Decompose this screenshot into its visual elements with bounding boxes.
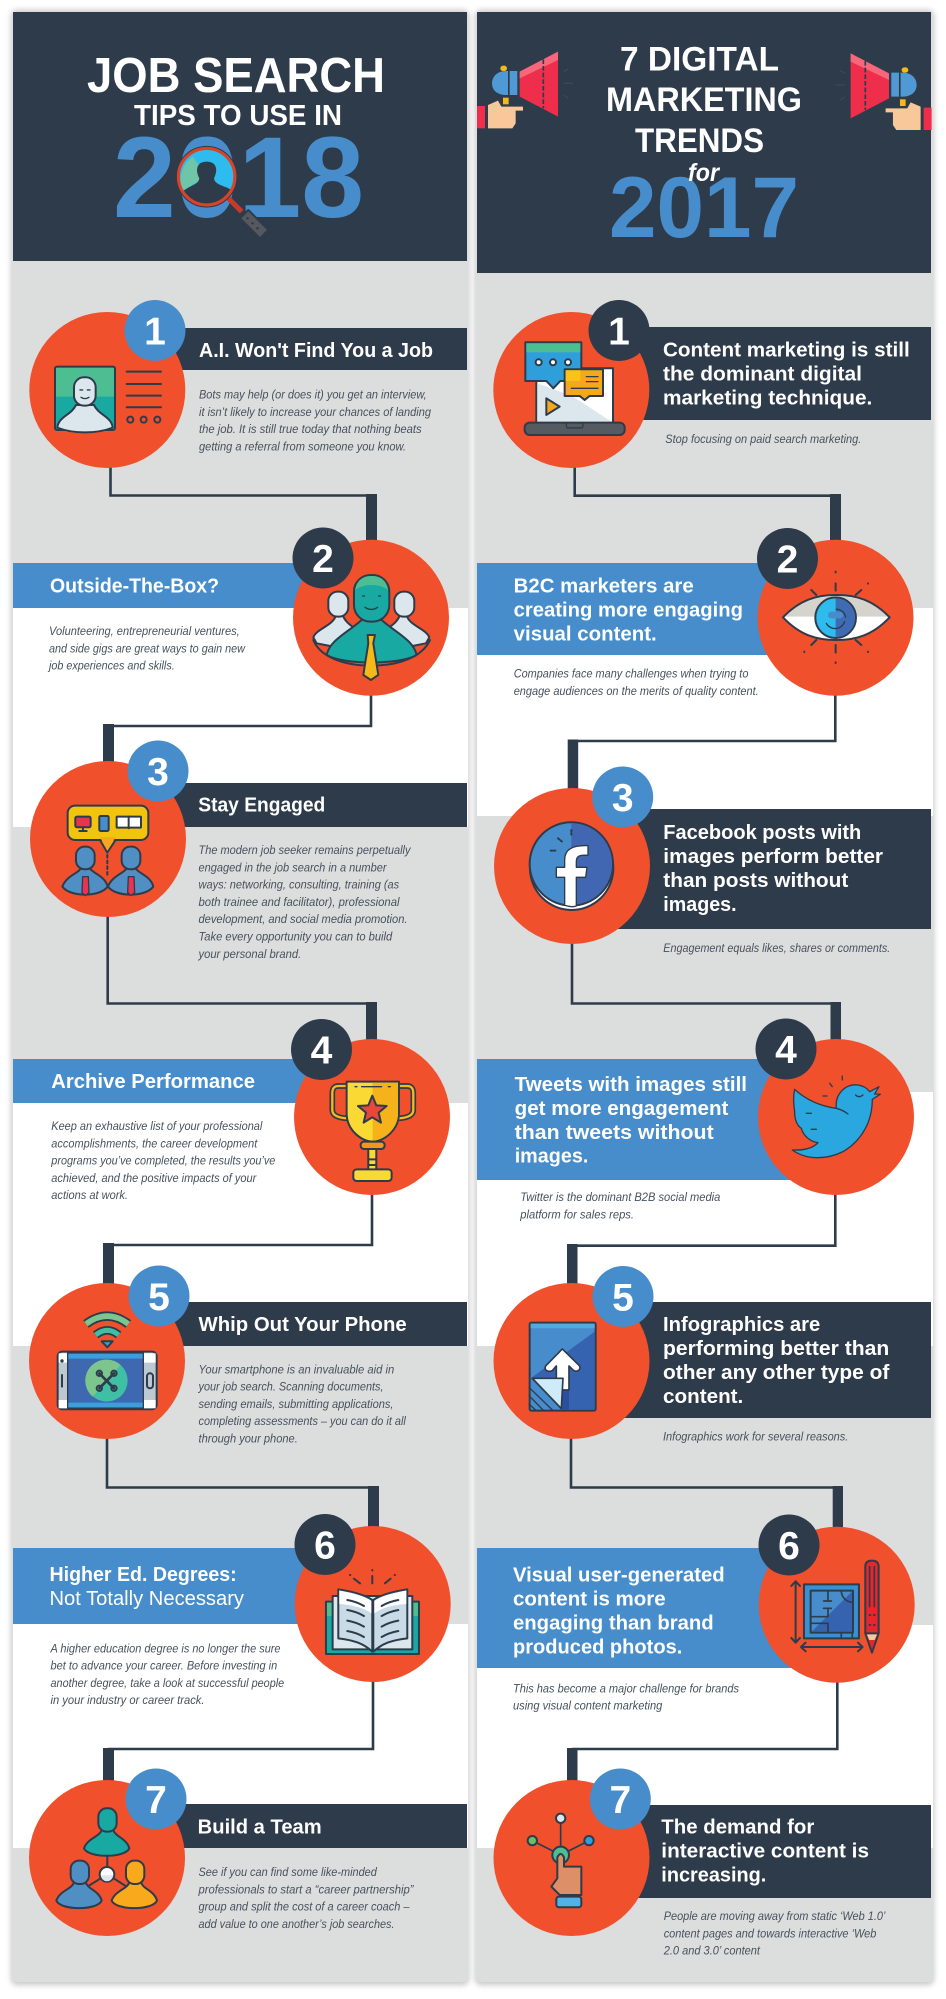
number badge 3: 3: [147, 751, 169, 794]
header: job search: [13, 12, 467, 261]
text block: engage audiences on the merits of quality content.: [514, 684, 759, 698]
heading: [515, 1074, 747, 1168]
text block: completing assessments – you can do it all: [198, 1414, 407, 1428]
number badge 6: 6: [778, 1525, 800, 1568]
text block: using visual content marketing: [513, 1699, 662, 1713]
heading: Infographics are: [663, 1314, 820, 1336]
text block: through your phone.: [198, 1432, 298, 1446]
number badge 4: 4: [311, 1030, 333, 1072]
number badge 2: [292, 528, 354, 588]
text block: ways: networking, consulting, training (as: [198, 878, 399, 892]
connector: step 6 to 7: [572, 1678, 837, 1749]
text block: group and split the cost of a career coach –: [198, 1900, 410, 1914]
step 6: Higher Ed. Degrees: [13, 1514, 451, 1707]
heading: marketing technique.: [663, 388, 872, 410]
number badge 1: 1: [608, 310, 630, 354]
heading: visual content.: [514, 623, 657, 645]
text block: actions at work.: [51, 1188, 128, 1202]
text block: Your smartphone is an invaluable aid in: [198, 1362, 394, 1376]
connector: step 5 to 6: [107, 1435, 373, 1488]
icon: open book: [326, 1570, 419, 1654]
text block: accomplishments, the career development: [51, 1136, 258, 1150]
heading: produced photos.: [513, 1636, 682, 1658]
number badge 4: [291, 1019, 352, 1080]
connector: step 5 to 6: [571, 1435, 838, 1488]
title: 7 digital marketing trends for 2017: MARKETING: [606, 81, 802, 119]
icon: eye: [783, 572, 890, 663]
number badge 2: [757, 528, 818, 589]
connector: step 4 to 5: [572, 1190, 835, 1246]
text block: [663, 1909, 886, 1958]
text block: sending emails, submitting applications,: [198, 1397, 394, 1411]
number badge 7: 7: [609, 1779, 631, 1822]
text block: [50, 1641, 284, 1707]
number badge 7: [590, 1768, 651, 1830]
heading: The demand for: [661, 1816, 815, 1838]
text block: [198, 1865, 414, 1931]
icon: right megaphone: [836, 53, 932, 130]
step 3: Stay Engaged: [30, 740, 467, 961]
title: 7 digital marketing trends for 2017: 2017: [609, 160, 799, 256]
icon: twitter bird: [792, 1076, 880, 1158]
text block: 2.0 and 3.0’ content: [663, 1944, 760, 1958]
title: 7 digital marketing trends for 2017: for: [688, 159, 720, 187]
icon: facebook coin: [530, 822, 613, 910]
step 3: facebook posts: [494, 766, 931, 955]
text block: Stop focusing on paid search marketing.: [665, 432, 861, 446]
number badge 4: [756, 1018, 816, 1080]
heading: engaging than brand: [513, 1613, 714, 1635]
heading: performing better than: [663, 1338, 889, 1360]
heading: Facebook posts with: [663, 822, 861, 844]
number badge 7: 7: [145, 1779, 167, 1822]
text block: both trainee and facilitator), professional: [198, 895, 401, 909]
heading: content.: [663, 1386, 743, 1408]
text block: professionals to start a “career partnership”: [198, 1882, 414, 1896]
step 5: Whip Out Your Phone: [29, 1266, 467, 1446]
number badge 6: [294, 1514, 356, 1575]
text block: Take every opportunity you can to build: [198, 930, 393, 944]
heading: [50, 1564, 244, 1610]
text block: another degree, take a look at successful people: [50, 1676, 284, 1690]
title: 7 digital marketing trends for 2017: 7 DIGITAL: [620, 41, 779, 79]
text block: See if you can find some like-minded: [198, 1865, 378, 1879]
heading: Stay Engaged: [198, 795, 325, 817]
text block: job experiences and skills.: [47, 659, 175, 673]
header: digital marketing: [477, 12, 932, 273]
title: job search tips to use in 2018: JOB SEARCH: [87, 49, 385, 103]
connector: step 3 to 4: [108, 915, 372, 1004]
number badge 7: [126, 1768, 186, 1830]
text block: The modern job seeker remains perpetually: [198, 843, 411, 857]
text block: content pages and towards interactive ‘Web: [664, 1926, 876, 1940]
heading: B2C marketers are: [514, 576, 694, 598]
panel: job search tips: [11, 10, 469, 1985]
heading: Build a Team: [198, 1816, 322, 1838]
icon: trophy: [332, 1082, 413, 1181]
heading: [663, 1314, 890, 1408]
number badge 5: 5: [148, 1276, 170, 1319]
number badge 3: [592, 766, 653, 828]
text block: and side gigs are great ways to gain new: [49, 641, 246, 655]
text block: achieved, and the positive impacts of your: [51, 1171, 257, 1185]
heading: [663, 822, 883, 916]
heading: Outside-The-Box?: [50, 576, 219, 598]
step 7: Build a Team: [29, 1768, 467, 1936]
text block: getting a referral from someone you know.: [199, 439, 406, 453]
panel: digital marketing trends: [475, 10, 934, 1985]
text block: [198, 843, 411, 961]
step 5: infographics: [494, 1266, 931, 1444]
number badge 1: [588, 300, 650, 361]
number badge 6: 6: [314, 1524, 336, 1568]
connector: step 1 to 2: [575, 465, 836, 496]
icon: laptop with chat bubbles: [525, 342, 625, 435]
text block: [198, 1362, 407, 1446]
number badge 3: [128, 740, 188, 802]
heading: than posts without: [663, 870, 849, 892]
text block: Engagement equals likes, shares or comments.: [663, 941, 890, 955]
heading: interactive content is: [661, 1840, 869, 1862]
text block: [50, 1119, 275, 1202]
text block: Companies face many challenges when trying to: [514, 667, 748, 681]
number badge 1: [124, 300, 186, 361]
icon: profile card: [55, 367, 161, 432]
icon: magnifying glass over person: [176, 146, 268, 238]
heading: get more engagement: [515, 1098, 729, 1120]
step 1: content marketing: [493, 300, 931, 468]
text block: Volunteering, entrepreneurial ventures,: [49, 624, 240, 638]
heading: Not Totally Necessary: [50, 1588, 244, 1610]
number badge 3: 3: [612, 777, 634, 820]
heading: Content marketing is still: [663, 340, 910, 362]
text block: Bots may help (or does it) you get an interview,: [199, 388, 427, 402]
text block: Keep an exhaustive list of your professional: [51, 1119, 263, 1133]
step 1: A.I. Won't Find You a Job: [29, 300, 467, 468]
text block: it isn’t likely to increase your chances of landing: [199, 405, 431, 419]
connector: step 6 to 7: [108, 1678, 373, 1749]
heading: [663, 340, 910, 410]
icon: infographic page with upload arrow: [529, 1323, 596, 1411]
title: job search tips to use in 2018: [87, 49, 385, 242]
text block: [47, 624, 246, 673]
number badge 5: [128, 1266, 190, 1326]
text block: engaged in the job search in a number: [198, 860, 387, 874]
heading: increasing.: [661, 1864, 766, 1886]
step 4: Archive Performance: [13, 1019, 450, 1202]
heading: Tweets with images still: [515, 1074, 747, 1096]
text block: [514, 667, 759, 698]
step 2: Outside-The-Box?: [13, 528, 449, 696]
text block: [519, 1190, 720, 1222]
text block: the job. It is still true today that nothing beats: [199, 422, 422, 436]
text block: platform for sales reps.: [519, 1208, 634, 1222]
text block: development, and social media promotion.: [198, 912, 408, 926]
icon: left megaphone: [477, 52, 573, 128]
step 6: visual user-generated content: [477, 1514, 915, 1713]
icon: blueprint and pencil: [791, 1561, 879, 1653]
connector: step 2 to 3: [108, 690, 371, 726]
step 2: B2C marketers: [477, 528, 914, 698]
heading: [513, 1565, 725, 1658]
heading: images.: [515, 1146, 588, 1168]
heading: Higher Ed. Degrees:: [50, 1564, 237, 1586]
number badge 2: 2: [777, 538, 798, 582]
heading: [514, 576, 743, 645]
heading: other any other type of: [663, 1362, 890, 1384]
connector: step 4 to 5: [108, 1190, 372, 1245]
text block: programs you’ve completed, the results you’ve: [50, 1154, 275, 1168]
text block: Infographics work for several reasons.: [663, 1430, 848, 1444]
step 7: interactive content: [494, 1768, 931, 1958]
title: 7 digital marketing trends for 2017: TRENDS: [635, 122, 764, 160]
number badge 4: 4: [775, 1029, 797, 1072]
text block: bet to advance your career. Before investing in: [50, 1659, 277, 1673]
icon: smartphone and wifi: [58, 1316, 157, 1409]
text block: your personal brand.: [198, 947, 301, 961]
text block: [199, 388, 431, 453]
text block: People are moving away from static ‘Web 1.0’: [664, 1909, 886, 1923]
icon: team network: [56, 1808, 157, 1908]
heading: A.I. Won't Find You a Job: [199, 340, 433, 362]
heading: creating more engaging: [514, 600, 743, 622]
connector: step 3 to 4: [572, 940, 836, 1004]
connector: step 1 to 2: [110, 465, 372, 496]
icon: team with tie: [313, 575, 430, 680]
heading: Whip Out Your Phone: [198, 1314, 407, 1336]
icon: hand touching network: [528, 1814, 594, 1907]
heading: the dominant digital: [663, 364, 862, 386]
text block: in your industry or career track.: [50, 1693, 204, 1707]
text block: add value to one another’s job searches.: [198, 1917, 394, 1931]
heading: [661, 1816, 869, 1886]
step 4: tweets with images: [477, 1018, 914, 1222]
heading: content is more: [513, 1589, 666, 1611]
title: job search tips to use in 2018: TIPS TO USE IN: [134, 100, 342, 132]
title: 7 digital marketing trends for 2017: [606, 41, 802, 256]
heading: Archive Performance: [51, 1071, 255, 1093]
heading: images perform better: [663, 846, 883, 868]
heading: images.: [663, 894, 737, 916]
number badge 2: 2: [312, 538, 334, 581]
number badge 6: [758, 1514, 820, 1576]
number badge 1: 1: [144, 310, 166, 354]
number badge 5: [592, 1266, 654, 1327]
number badge 5: 5: [612, 1276, 634, 1320]
text block: your job search. Scanning documents,: [198, 1380, 384, 1394]
connector: step 2 to 3: [572, 690, 835, 741]
text block: This has become a major challenge for brands: [513, 1681, 739, 1695]
text block: Twitter is the dominant B2B social media: [520, 1190, 720, 1204]
icon: two people talking: [62, 806, 153, 896]
title: job search tips to use in 2018: 2018: [113, 114, 364, 242]
heading: Visual user-generated: [513, 1565, 725, 1587]
text block: A higher education degree is no longer the sure: [50, 1641, 281, 1655]
heading: than tweets without: [515, 1122, 714, 1144]
text block: [513, 1681, 739, 1713]
